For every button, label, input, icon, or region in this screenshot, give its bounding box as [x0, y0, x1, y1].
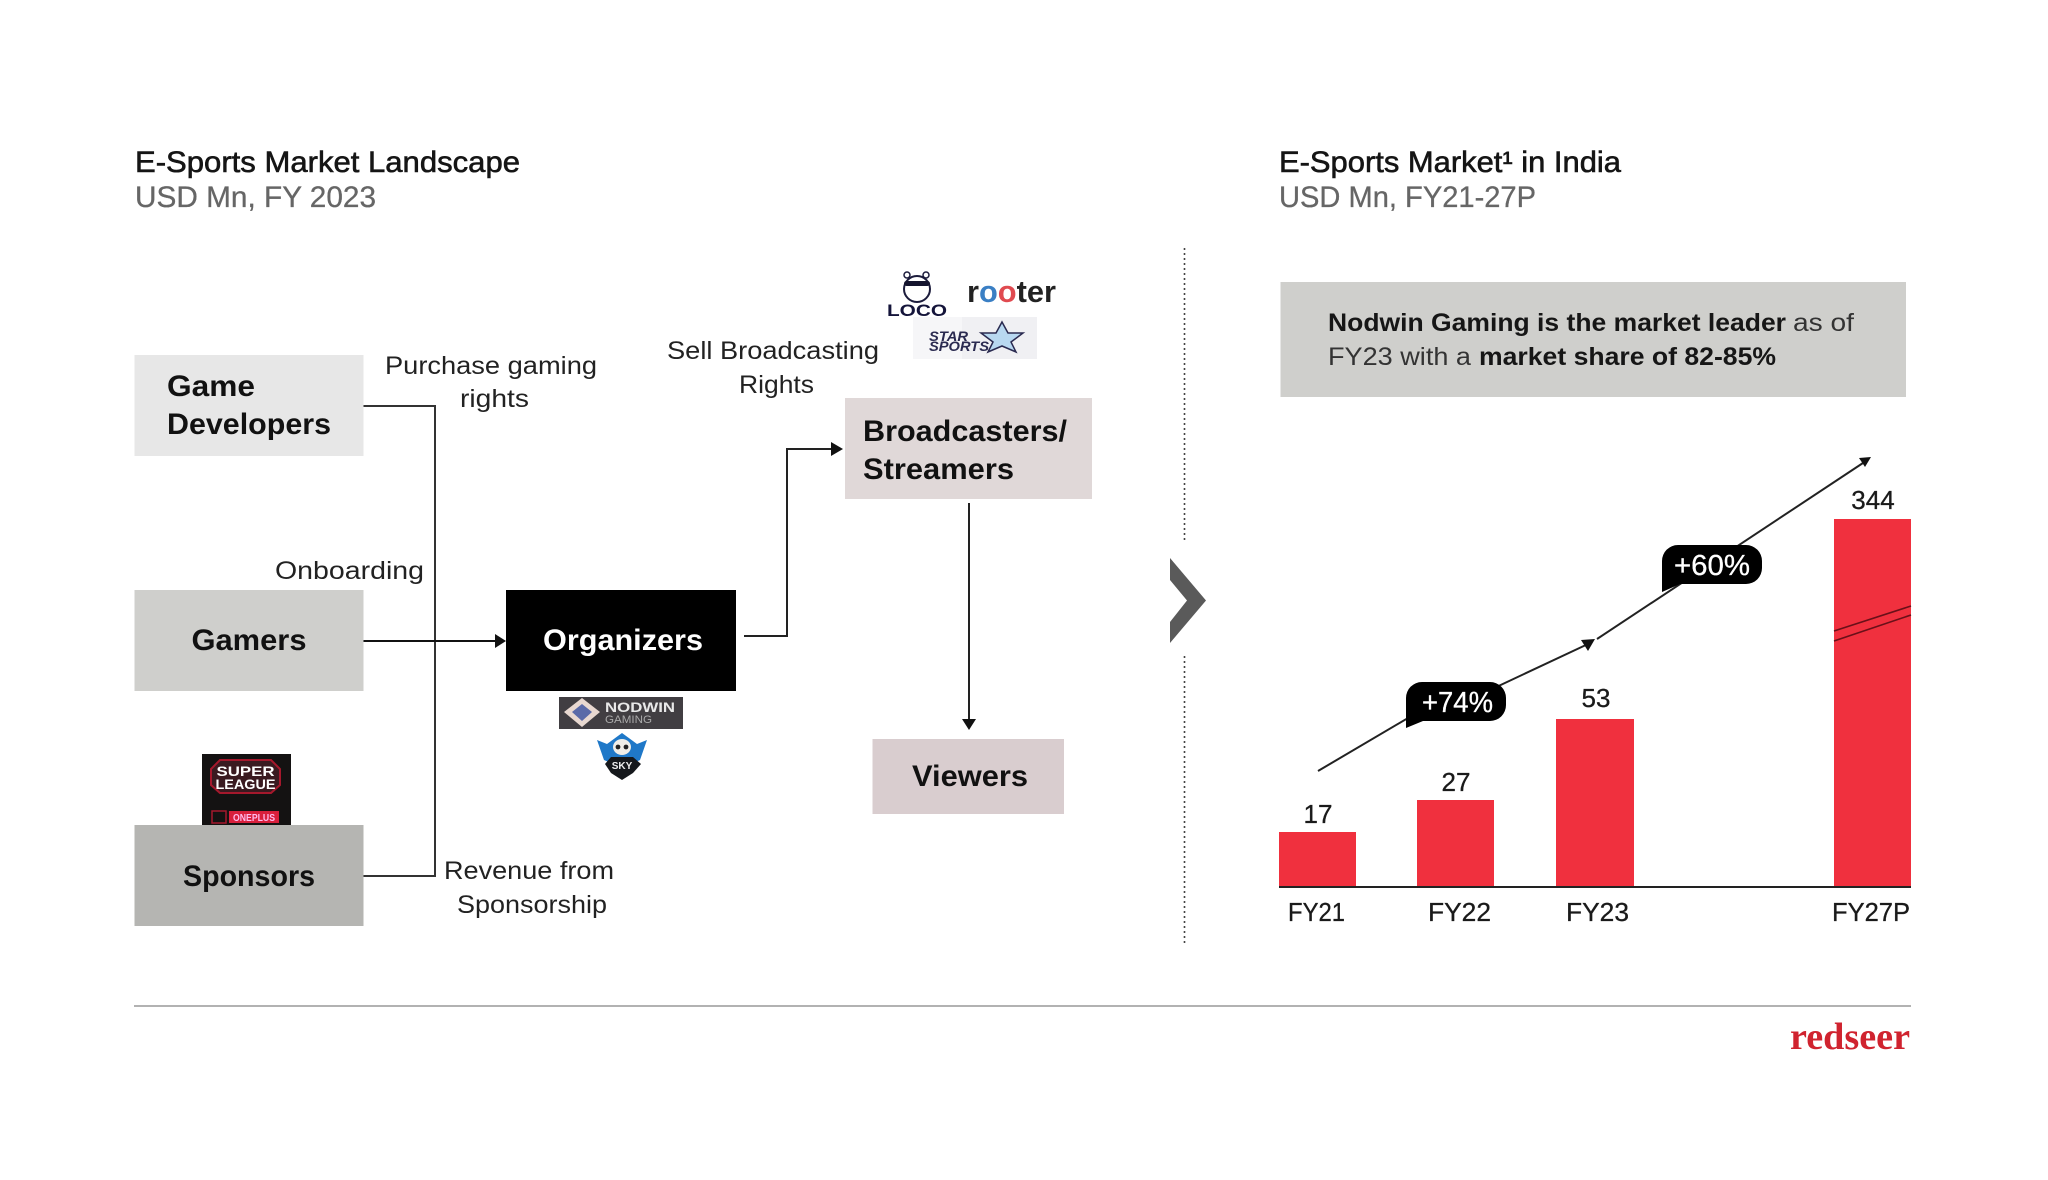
axis labels: [1288, 897, 1910, 927]
bar FY23: [1556, 719, 1634, 887]
label: Sell Broadcasting Rights: Rights: [739, 371, 814, 399]
bar chart: E-Sports market in India: [1279, 485, 1911, 927]
label: Revenue from Sponsorship: [444, 857, 614, 919]
label: Revenue from Sponsorship: Sponsorship: [457, 891, 607, 919]
callout: +74% CAGR: [1406, 682, 1506, 728]
box: Organizers: Organizers: [543, 624, 703, 657]
axis labels: FY23: [1566, 897, 1629, 927]
heading: E-Sports Market Landscape: E-Sports Market Landscape: [135, 146, 520, 179]
value labels: 17: [1304, 799, 1332, 829]
logo: Star Sports: STAR: [929, 328, 969, 344]
callout: Nodwin market leader: market share of 82-85%: [1479, 343, 1776, 371]
box: Game Developers: Game: [167, 370, 255, 403]
value labels: [1304, 485, 1895, 829]
label: Sell Broadcasting Rights: [667, 337, 879, 399]
box: Broadcasters / Streamers: Streamers: [863, 453, 1014, 486]
callout: Nodwin market leader: FY23 with a: [1328, 343, 1471, 371]
heading: E-Sports Market in India: [1279, 146, 1621, 214]
logo: Nodwin Gaming: NODWIN: [605, 699, 675, 715]
bar FY21: [1279, 832, 1356, 887]
logo: Loco: LOCO: [887, 301, 947, 320]
value labels: 53: [1582, 683, 1610, 713]
growth arrow: FY23 to FY27P: [1597, 457, 1871, 639]
logo: Loco: [887, 272, 947, 320]
callout: +60% CAGR: [1662, 545, 1762, 592]
box: Viewers: [872, 739, 1064, 814]
label: Purchase gaming rights: rights: [460, 385, 529, 413]
callout: Nodwin market leader: Nodwin Gaming is the market leader: [1328, 309, 1786, 337]
bar FY22: [1417, 800, 1494, 887]
axis labels: FY27P: [1832, 897, 1910, 927]
axis labels: FY21: [1288, 897, 1345, 927]
box: Broadcasters / Streamers: Broadcasters/: [863, 415, 1068, 448]
logo: redseer: redseer: [1790, 1016, 1910, 1058]
callout: Nodwin market leader: [1280, 282, 1906, 397]
logo: Skyesports: SKY: [612, 761, 633, 772]
value labels: 344: [1851, 485, 1895, 515]
box: Sponsors: Sponsors: [183, 860, 315, 893]
arrow: organizers to broadcasters: [744, 442, 843, 636]
logo: Super League OnePlus: LEAGUE: [216, 776, 276, 792]
logo: Nodwin Gaming: GAMING: [605, 714, 652, 726]
logo: Skyesports: [597, 733, 647, 780]
divider: [1184, 248, 1186, 946]
logo: rooter: rooter: [967, 274, 1056, 309]
box: Sponsors: [134, 825, 364, 926]
bar FY27P with axis break: [1834, 519, 1911, 887]
heading: E-Sports Market Landscape: [135, 146, 520, 214]
callout: Nodwin market leader: as of: [1793, 309, 1854, 337]
box: Gamers: Gamers: [192, 624, 306, 657]
label: Purchase gaming rights: [385, 352, 597, 413]
value labels: 27: [1442, 767, 1470, 797]
axis labels: FY22: [1428, 897, 1491, 927]
heading: E-Sports Market in India: E-Sports Market¹ in India: [1279, 146, 1621, 179]
box: Game Developers: [134, 355, 364, 456]
footer rule: [134, 1005, 1911, 1007]
heading: E-Sports Market in India: USD Mn, FY21-27P: [1279, 181, 1536, 214]
box: Broadcasters / Streamers: [845, 398, 1092, 499]
label: Revenue from Sponsorship: Revenue from: [444, 857, 614, 885]
growth arrow: FY21 to FY23: [1318, 639, 1595, 771]
x axis: [1279, 886, 1911, 888]
box: Game Developers: Developers: [167, 408, 331, 441]
arrow: broadcasters to viewers: [962, 503, 976, 730]
box: Viewers: Viewers: [912, 760, 1028, 793]
callout: +60% CAGR: +60%: [1674, 550, 1750, 582]
logo: Super League OnePlus: ONEPLUS: [233, 813, 275, 824]
logo: Star Sports: SPORTS: [929, 338, 990, 354]
heading: E-Sports Market Landscape: USD Mn, FY 2023: [135, 181, 376, 214]
box: Gamers: [134, 590, 364, 691]
logo: Star Sports: [913, 317, 1037, 359]
icon: chevron arrow: [1170, 558, 1206, 643]
callout: +74% CAGR: +74%: [1422, 687, 1493, 719]
label: Purchase gaming rights: Purchase gaming: [385, 352, 597, 380]
logo: Super League OnePlus: [202, 754, 291, 825]
connector lines: inputs to organizers: [363, 406, 506, 876]
logo: Nodwin Gaming: [559, 697, 683, 729]
logo: Super League OnePlus: SUPER: [216, 763, 274, 779]
box: Organizers: [506, 590, 736, 691]
label: Sell Broadcasting Rights: Sell Broadcasting: [667, 337, 879, 365]
label: Onboarding: Onboarding: [275, 557, 424, 585]
